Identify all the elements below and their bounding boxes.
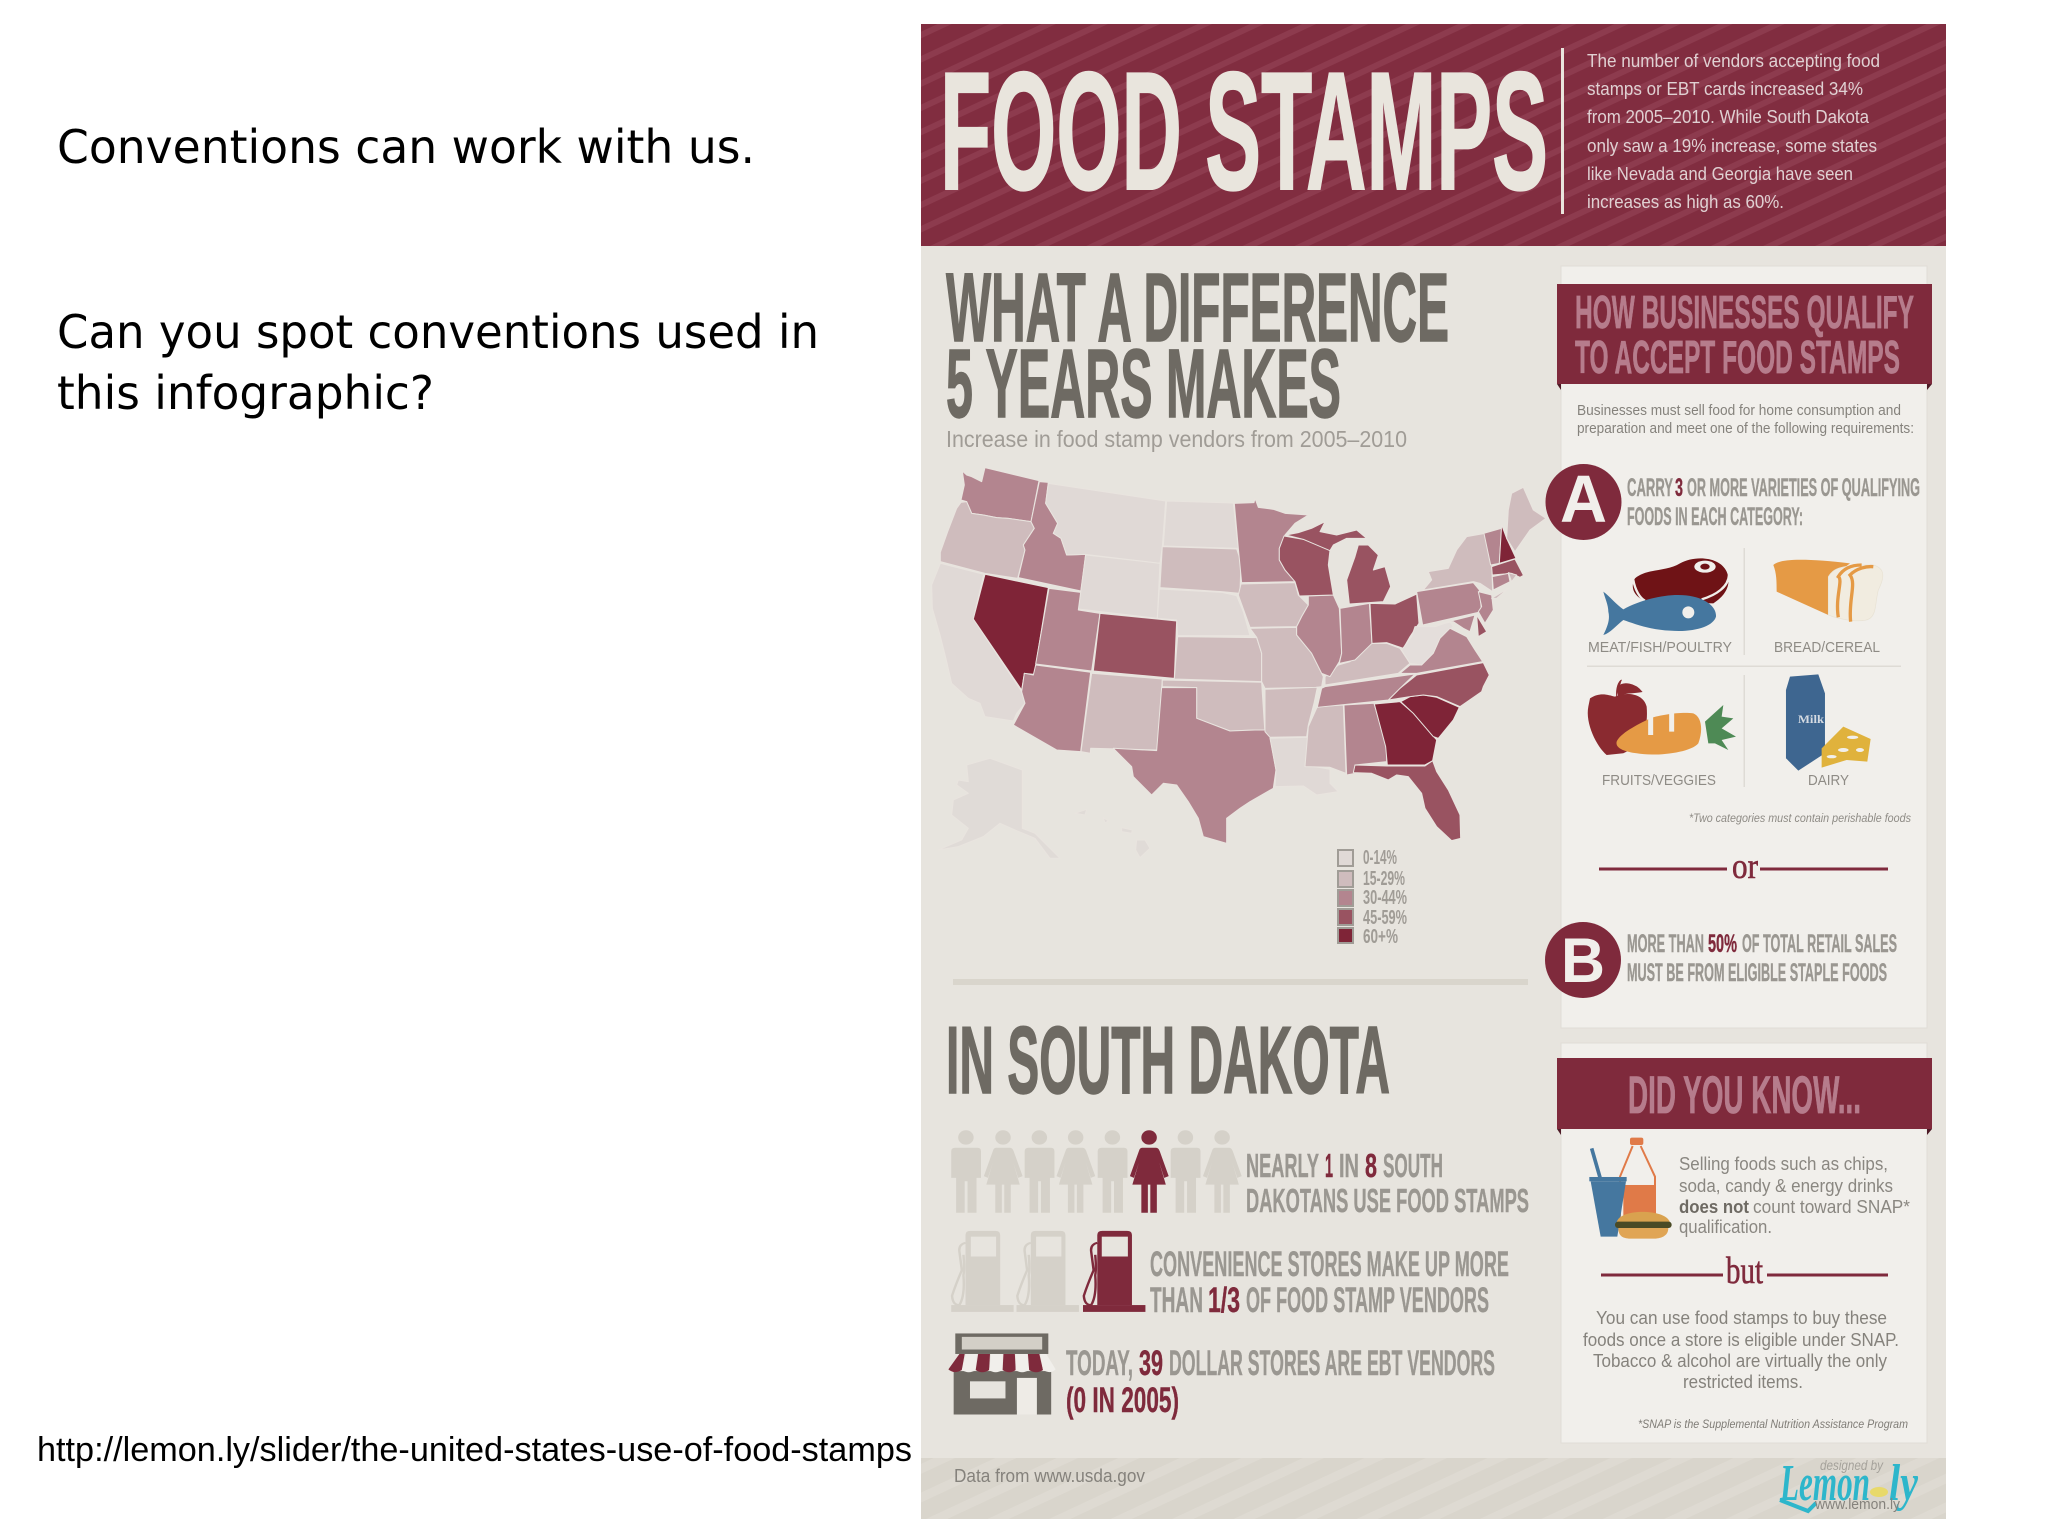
or divider: or (1732, 846, 1758, 886)
left question text: Can you spot conventions used in (57, 305, 819, 359)
panel header (1557, 1058, 1932, 1135)
stat: dollar stores (1066, 1344, 1495, 1420)
slide with infographic: IN SOUTH DAKOTA (946, 1007, 1390, 1114)
qualification intro: Businesses must sell food for home consumption and (1577, 403, 1901, 419)
text: selling foods: soda, candy & energy drinks (1679, 1176, 1893, 1196)
footer strip (921, 1458, 1946, 1519)
banner intro paragraph: from 2005–2010. While South Dakota (1587, 107, 1870, 127)
but divider: but (1726, 1250, 1763, 1292)
stat: 1 in 8: DAKOTANS USE FOOD STAMPS (1246, 1182, 1529, 1219)
badge a (1546, 462, 1622, 540)
label: fruits veggies: FRUITS/VEGGIES (1602, 773, 1716, 789)
data source: Data from www.usda.gov (954, 1465, 1146, 1486)
map subtitle: Increase in food stamp vendors from 2005–2010 (946, 426, 1407, 452)
heading: what a difference: 5 YEARS MAKES (946, 329, 1341, 438)
banner intro paragraph: stamps or EBT cards increased 34% (1587, 79, 1863, 99)
panel: how businesses qualify (1545, 266, 1932, 1028)
footnote: perishable foods: *Two categories must contain perishable foods (1689, 813, 1911, 825)
banner divider (1561, 48, 1564, 214)
badge b (1545, 922, 1621, 998)
stat: convenience stores: OF FOOD STAMP VENDORS (1246, 1281, 1489, 1320)
text: you can use food stamps: You can use food stamps to buy these (1596, 1307, 1887, 1328)
label: bread cereal: BREAD/CEREAL (1774, 640, 1880, 656)
requirement a text (1627, 474, 1920, 531)
text: selling foods: Selling foods such as chips, (1679, 1154, 1888, 1174)
stat: convenience stores: 1/3 (1208, 1281, 1240, 1320)
panel: did you know (1557, 1043, 1932, 1443)
text: you can use food stamps: restricted items. (1683, 1371, 1803, 1392)
icon: meat and fish (1603, 558, 1729, 635)
icon: milk and cheese (1786, 674, 1871, 771)
panel header (1557, 284, 1932, 390)
footnote: snap: *SNAP is the Supplemental Nutrition Assistance Program (1638, 1419, 1908, 1431)
stat: dollar stores: (0 IN 2005) (1066, 1381, 1179, 1420)
left question text: this infographic? (57, 366, 434, 420)
text: you can use food stamps (1583, 1307, 1899, 1392)
requirement b text: 50% (1708, 930, 1737, 958)
gas pump pictogram: 1/3 (951, 1231, 1145, 1312)
lemon.ly logo: Lemon (1779, 1455, 1870, 1512)
banner intro paragraph: like Nevada and Georgia have seen (1587, 164, 1853, 184)
left question text (57, 305, 819, 420)
people pictogram: 1 in 8 (951, 1130, 1242, 1213)
requirement b text (1627, 930, 1897, 987)
stat: 1 in 8: 8 (1365, 1147, 1377, 1184)
label: dairy: DAIRY (1808, 773, 1849, 789)
milk carton text: Milk (1798, 712, 1824, 726)
map legend: 60+% (1363, 926, 1398, 948)
or divider (1599, 846, 1888, 886)
requirement a text: 3 (1675, 474, 1683, 502)
requirement b text: MORE THAN (1627, 930, 1704, 958)
qualification intro: preparation and meet one of the following requirements: (1577, 421, 1914, 437)
qualification intro (1577, 403, 1914, 437)
stat: 1 in 8: 1 (1325, 1147, 1333, 1184)
lemon.ly logo: ly (1889, 1455, 1919, 1512)
banner intro paragraph: only saw a 19% increase, some states (1587, 136, 1877, 156)
infographic body background (921, 246, 1946, 1458)
map legend: 30-44% (1363, 887, 1407, 909)
stat: convenience stores: CONVENIENCE STORES MAKE UP MORE (1150, 1245, 1509, 1284)
left heading: conventions: Conventions can work with us. (57, 120, 755, 174)
icon: bread (1773, 560, 1883, 622)
but divider (1601, 1250, 1888, 1292)
banner intro paragraph: The number of vendors accepting food (1587, 51, 1880, 71)
banner (921, 24, 1946, 246)
requirement a text: CARRY (1627, 474, 1673, 502)
banner intro paragraph: increases as high as 60%. (1587, 192, 1784, 212)
stat: dollar stores: 39 (1139, 1344, 1163, 1383)
stat: 1 in 8: SOUTH (1383, 1147, 1443, 1184)
eastern states (1234, 487, 1546, 841)
map legend (1338, 847, 1407, 948)
lemon.ly logo: designed by (1820, 1457, 1884, 1473)
label: meat fish poultry: MEAT/FISH/POULTRY (1588, 640, 1732, 656)
text: you can use food stamps: Tobacco & alcohol are virtually the only (1593, 1350, 1888, 1371)
text: selling foods: does not (1679, 1197, 1749, 1217)
heading: what a difference (946, 253, 1449, 438)
stat: 1 in 8 (1246, 1147, 1529, 1219)
badge a: A (1560, 462, 1607, 537)
requirement a text: FOODS IN EACH CATEGORY: (1627, 503, 1803, 531)
requirement b text: OF TOTAL RETAIL SALES (1742, 930, 1897, 958)
source url: http://lemon.ly/slider/the-united-states-use-of-food-stamps (37, 1431, 912, 1469)
stat: dollar stores: DOLLAR STORES ARE EBT VENDORS (1169, 1344, 1495, 1383)
text: selling foods: count toward SNAP* (1753, 1197, 1910, 1217)
stat: dollar stores: TODAY, (1066, 1344, 1133, 1383)
slide with infographic: WHAT A DIFFERENCE (946, 253, 1449, 362)
badge b: B (1561, 926, 1605, 996)
banner intro paragraph (1587, 51, 1880, 212)
us map (932, 468, 1546, 858)
western states (932, 468, 1276, 858)
stat: convenience stores: THAN (1150, 1281, 1203, 1320)
text: selling foods: qualification. (1679, 1217, 1772, 1237)
map legend: 45-59% (1363, 907, 1407, 929)
icon: soda and burger (1589, 1138, 1672, 1239)
text: you can use food stamps: foods once a store is eligible under SNAP. (1583, 1329, 1899, 1350)
map legend: 15-29% (1363, 868, 1405, 890)
icon: fruits and veggies (1588, 680, 1736, 755)
stat: 1 in 8: IN (1339, 1147, 1359, 1184)
map legend: 0-14% (1363, 847, 1397, 869)
stat: 1 in 8: NEARLY (1246, 1147, 1319, 1184)
stat: convenience stores (1150, 1245, 1509, 1320)
store icon (948, 1333, 1056, 1415)
lemon.ly logo: www.lemon.ly (1814, 1496, 1900, 1513)
text: selling foods (1679, 1154, 1910, 1237)
